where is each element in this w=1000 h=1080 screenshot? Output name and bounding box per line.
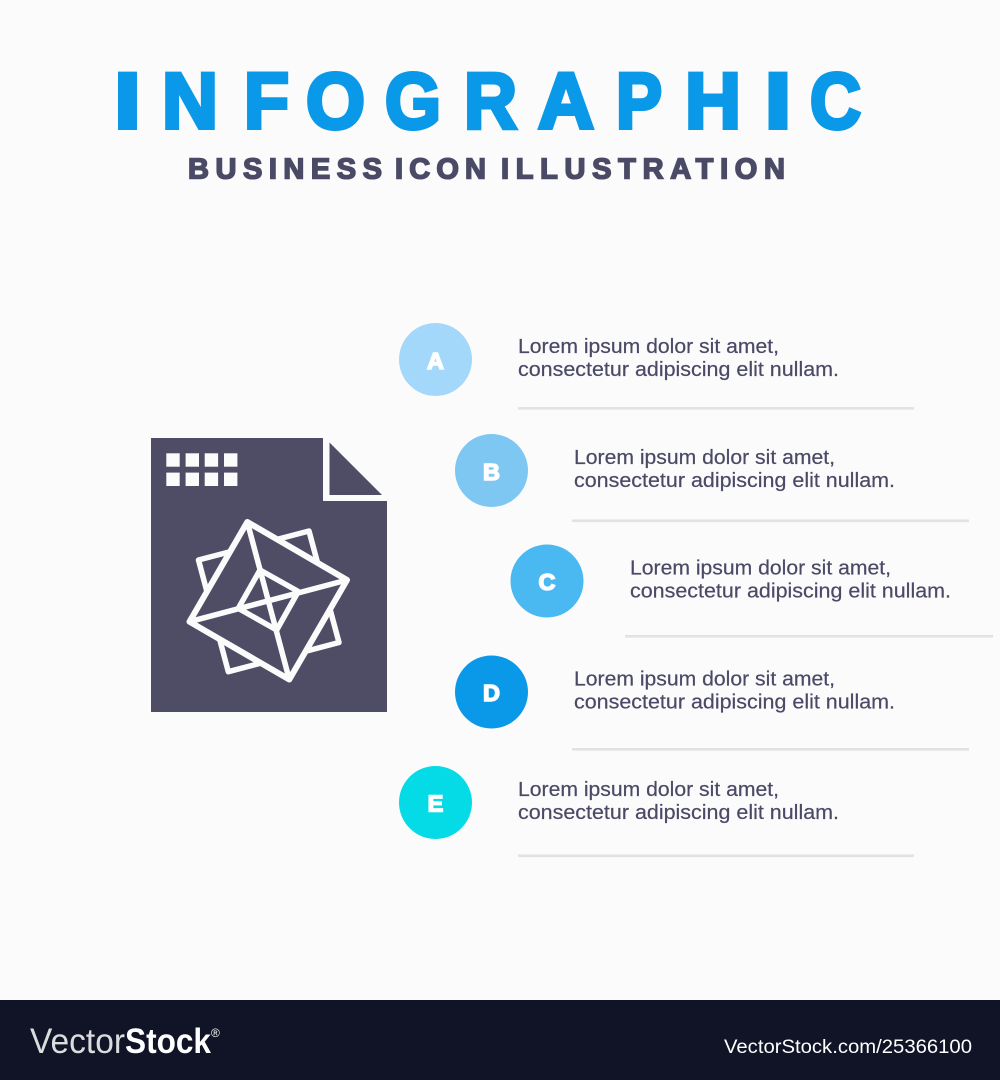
text B	[574, 447, 895, 492]
title: H	[685, 57, 741, 145]
text E: Lorem ipsum dolor sit amet,	[518, 779, 779, 801]
item E	[399, 766, 914, 857]
text D: Lorem ipsum dolor sit amet,	[574, 668, 835, 690]
subtitle	[188, 154, 785, 186]
title: P	[616, 57, 662, 145]
text E: consectetur adipiscing elit nullam.	[518, 802, 839, 824]
text C	[630, 558, 951, 602]
text E	[518, 779, 839, 824]
folded corner	[330, 442, 382, 495]
title: C	[810, 57, 861, 145]
text A	[518, 336, 839, 381]
item C	[510, 544, 993, 638]
subtitle: ICON	[395, 154, 486, 186]
footer bar	[0, 1000, 1000, 1080]
item D	[455, 656, 969, 751]
title: G	[385, 57, 441, 145]
title: I	[114, 57, 141, 145]
footer logo: Vector	[30, 1022, 125, 1061]
item B	[455, 434, 969, 522]
text D: consectetur adipiscing elit nullam.	[574, 692, 895, 714]
subtitle: BUSINESS	[188, 154, 382, 186]
text A: consectetur adipiscing elit nullam.	[518, 359, 839, 381]
title: A	[538, 57, 594, 145]
title: N	[162, 57, 218, 145]
badge A: A	[427, 348, 444, 374]
badge C: C	[539, 569, 556, 595]
footer image id: VectorStock.com/25366100	[724, 1036, 972, 1058]
title: F	[244, 57, 289, 145]
badge A	[399, 323, 472, 396]
grid of squares	[166, 453, 237, 486]
text C: Lorem ipsum dolor sit amet,	[630, 558, 891, 580]
badge D: D	[483, 680, 500, 706]
footer logo: Stock	[125, 1022, 211, 1061]
text B: Lorem ipsum dolor sit amet,	[574, 447, 835, 469]
geometric star cube	[190, 522, 347, 680]
title: O	[306, 57, 365, 145]
badge B: B	[483, 459, 500, 485]
text B: consectetur adipiscing elit nullam.	[574, 470, 895, 492]
text D	[574, 668, 895, 714]
badge C	[510, 544, 584, 618]
text A: Lorem ipsum dolor sit amet,	[518, 336, 779, 358]
title: R	[464, 57, 517, 145]
badge B	[455, 434, 528, 507]
document body	[151, 438, 387, 712]
badge D	[455, 656, 528, 728]
text C: consectetur adipiscing elit nullam.	[630, 580, 951, 602]
footer logo: ®	[211, 1026, 220, 1040]
title: I	[764, 57, 792, 145]
badge E	[399, 766, 472, 839]
title	[114, 57, 861, 145]
footer logo	[30, 1022, 220, 1061]
icon: document with geometric cube	[151, 438, 387, 712]
badge E: E	[428, 790, 443, 816]
item A	[399, 323, 914, 410]
subtitle: ILLUSTRATION	[501, 154, 785, 186]
